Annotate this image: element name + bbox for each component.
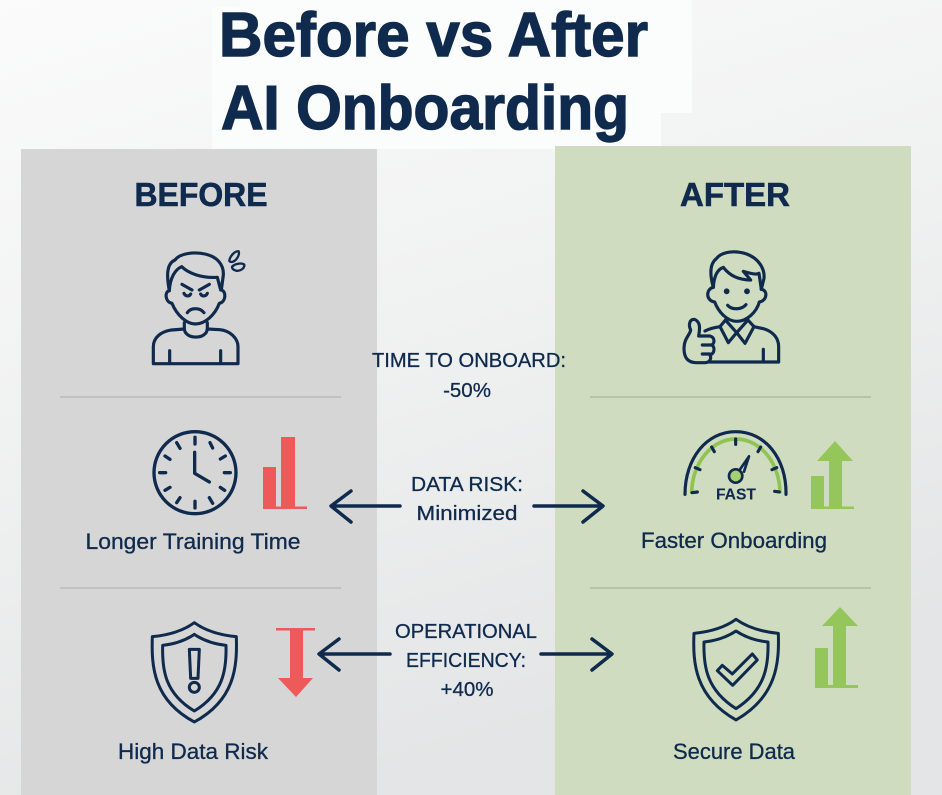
metric: operational efficiency xyxy=(395,620,537,701)
icon: green rising chart 1 xyxy=(811,441,854,509)
metric: data risk xyxy=(411,473,523,525)
metric: time to onboard xyxy=(372,349,566,402)
icon: frustrated person xyxy=(153,251,244,364)
metric: operational efficiency: EFFICIENCY: xyxy=(406,649,526,672)
metric: operational efficiency: OPERATIONAL xyxy=(395,620,537,643)
metric: time to onboard: TIME TO ONBOARD: xyxy=(372,349,566,372)
icon: clock xyxy=(154,432,236,514)
icon: happy person thumbs up xyxy=(684,252,779,363)
label: longer training time: Longer Training Time xyxy=(86,529,300,554)
icon: warning shield xyxy=(152,623,236,722)
arrow: data risk right xyxy=(534,491,603,522)
panel: after xyxy=(555,146,911,795)
title: Before vs After xyxy=(219,1,648,70)
arrow: data risk left xyxy=(331,491,400,522)
heading: before: BEFORE xyxy=(134,176,268,213)
arrow: efficiency right xyxy=(541,639,612,670)
icon: speedometer xyxy=(685,432,786,503)
label: faster onboarding: Faster Onboarding xyxy=(641,528,827,553)
icon: red bar chart xyxy=(263,437,307,509)
icon: green rising chart 2 xyxy=(815,607,858,688)
label: high data risk: High Data Risk xyxy=(118,739,269,764)
icon: speedometer: FAST xyxy=(716,486,757,503)
icon: secure shield xyxy=(694,619,778,720)
metric: data risk: Minimized xyxy=(416,502,518,525)
title: AI Onboarding xyxy=(221,74,629,143)
metric: data risk: DATA RISK: xyxy=(411,473,523,496)
heading: after: AFTER xyxy=(680,176,790,213)
title xyxy=(212,0,692,149)
label: secure data: Secure Data xyxy=(673,739,796,764)
icon: red down arrow xyxy=(276,628,315,697)
metric: time to onboard: -50% xyxy=(443,379,491,402)
panel: before xyxy=(21,149,377,795)
metric: operational efficiency: +40% xyxy=(440,678,494,701)
arrow: efficiency left xyxy=(319,639,390,670)
